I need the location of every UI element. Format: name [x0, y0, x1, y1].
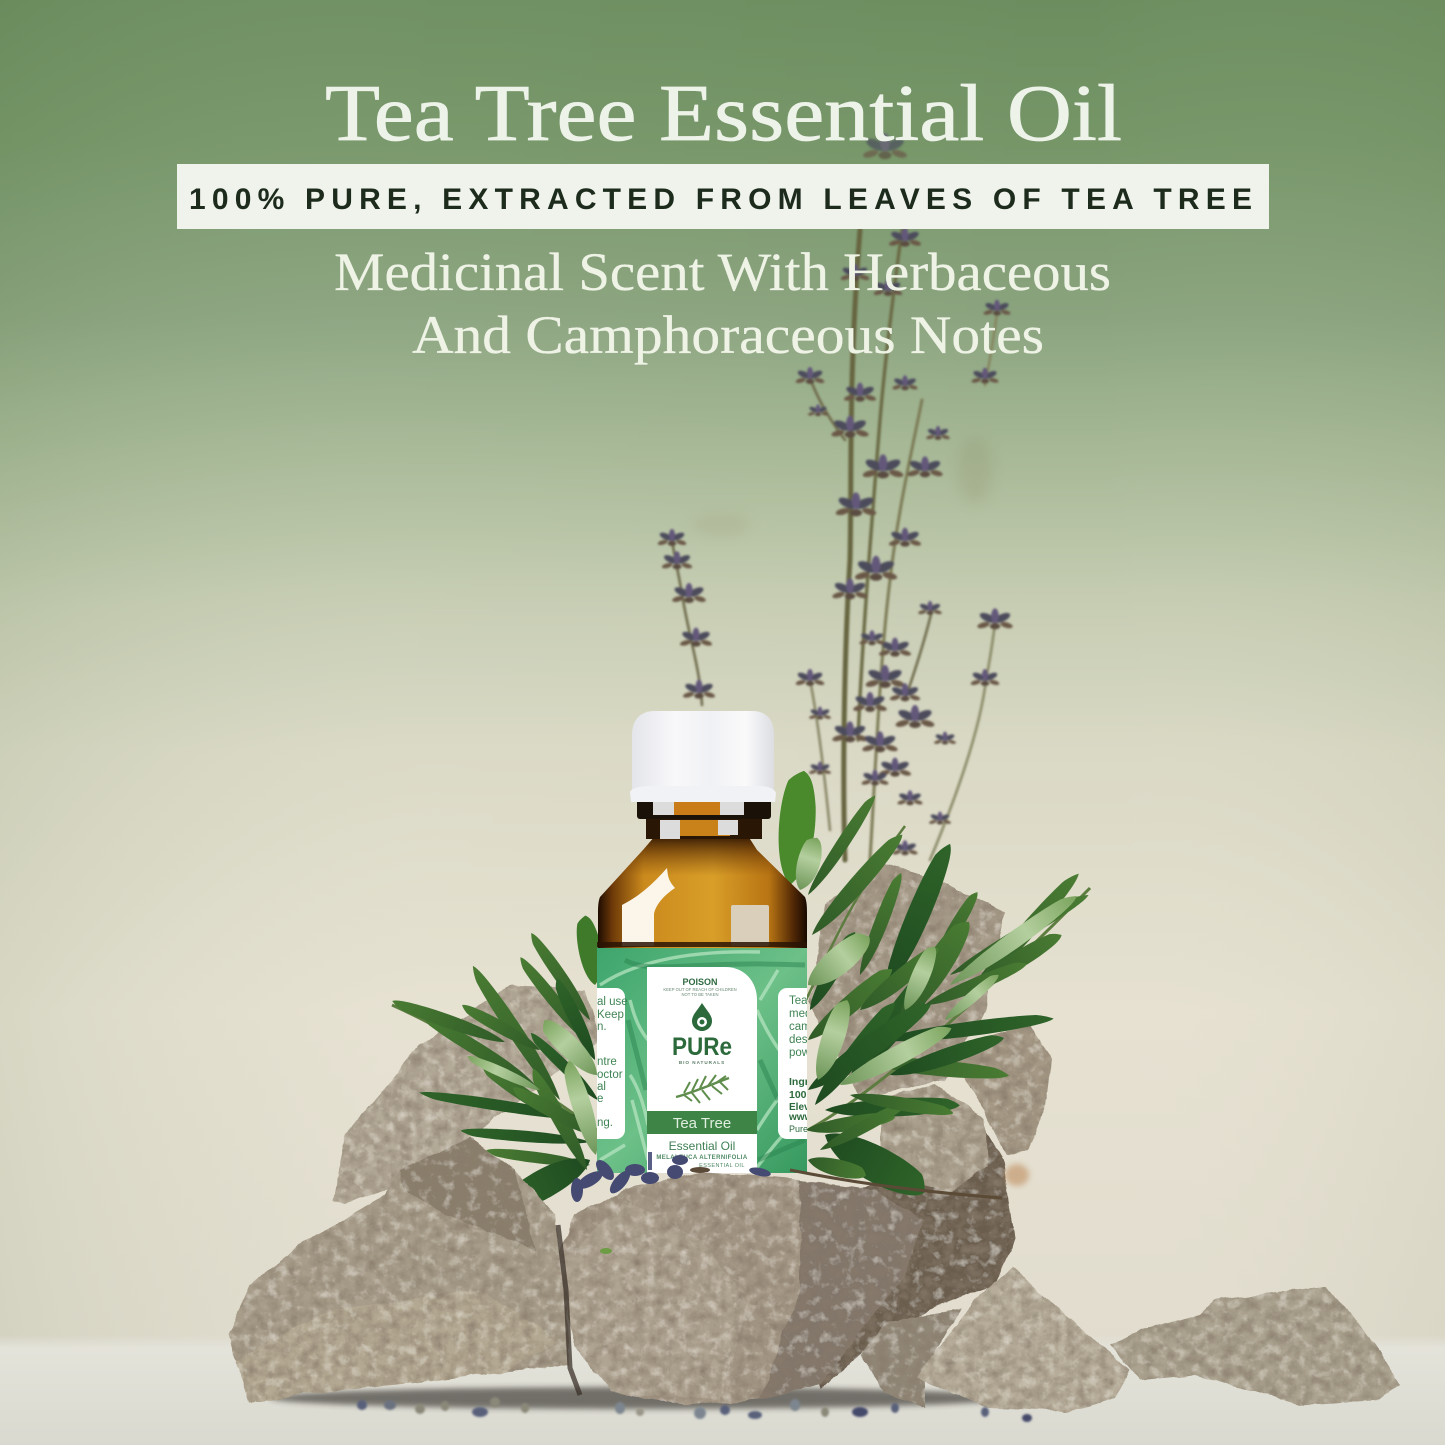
rock: upper right behind leaves — [810, 862, 1005, 1100]
label: 100 — [789, 1089, 807, 1101]
pure logo: PURe — [672, 1033, 732, 1061]
poison warning — [664, 978, 736, 996]
product bottle — [597, 711, 807, 1173]
essential oil text: Essential Oil — [669, 1139, 735, 1153]
rosemary sprig: right — [772, 769, 1092, 1208]
label: ESSENTIAL OIL — [699, 1163, 745, 1169]
label: pow — [789, 1047, 811, 1059]
crack between rocks — [558, 1225, 580, 1395]
rocks behind the sprigs — [333, 862, 1052, 1390]
label: Ingre — [789, 1076, 815, 1088]
rosemary sprig: left — [390, 914, 606, 1218]
rock: behind centre dark — [800, 1130, 1015, 1390]
poison warning: POISON — [682, 977, 718, 987]
pure logo: BIO NATURALS — [679, 1060, 725, 1065]
label: Tea — [789, 995, 808, 1007]
rock: triangular — [917, 1267, 1130, 1412]
subtitle: And Camphoraceous Notes — [412, 305, 1044, 365]
label: n. — [597, 1021, 607, 1033]
neck — [637, 797, 771, 819]
flower heads — [657, 133, 1013, 855]
title: Tea Tree Essential Oil — [325, 70, 1122, 158]
lavender crumbs on rock — [571, 1152, 772, 1202]
label sprig — [676, 1075, 729, 1103]
pure logo — [672, 1003, 732, 1065]
stems — [808, 888, 1090, 1130]
shoulder rim — [597, 942, 807, 947]
label: cam — [789, 1021, 811, 1033]
rock: large left — [228, 1138, 570, 1402]
label — [597, 948, 807, 1173]
twig across rock — [790, 1170, 1002, 1198]
left info panel — [597, 988, 625, 1139]
table surface — [0, 1335, 1445, 1445]
label: al — [597, 1081, 606, 1093]
white cap — [632, 711, 774, 792]
subtitle: Medicinal Scent With Herbaceous — [334, 242, 1111, 302]
small leaf fragment on rock — [600, 1248, 612, 1254]
poison warning: KEEP OUT OF REACH OF CHILDREN — [663, 987, 737, 992]
label: Tea Tree — [673, 1115, 731, 1132]
tagline band: 100% PURE, EXTRACTED FROM LEAVES OF TEA TREE — [189, 183, 1252, 216]
label: Pure — [789, 1124, 808, 1134]
label: Keep — [597, 1009, 624, 1021]
label: desc — [789, 1034, 814, 1046]
rock: small behind triangle — [860, 1310, 960, 1408]
rock: right mid — [880, 1085, 988, 1192]
stems — [672, 230, 998, 860]
subtitle — [334, 242, 1111, 365]
poison warning: NOT TO BE TAKEN — [681, 992, 719, 997]
stems — [392, 1005, 597, 1130]
soil shadow under rocks — [270, 1387, 1010, 1409]
label: MELALEUCA ALTERNIFOLIA — [656, 1155, 748, 1161]
label: ng. — [597, 1117, 613, 1129]
small blurred leaf fragment — [1005, 1164, 1029, 1186]
label: www — [788, 1112, 813, 1123]
rocks in front — [228, 1138, 1400, 1412]
centre white panel — [647, 967, 757, 1175]
label leaf pattern — [599, 950, 783, 1168]
label: med — [789, 1008, 811, 1020]
label: Elev — [789, 1102, 810, 1113]
label: al use — [597, 996, 628, 1008]
right info panel — [778, 988, 807, 1139]
label: e — [597, 1093, 603, 1105]
rock: far right slab — [1110, 1287, 1400, 1405]
glass highlights — [622, 868, 675, 946]
dried lavender stems — [657, 133, 1013, 860]
label: octor — [597, 1069, 623, 1081]
tea tree band — [647, 1111, 757, 1134]
tagline band — [177, 164, 1269, 229]
rock: upper left slab — [333, 985, 600, 1204]
label: ntre — [597, 1056, 617, 1068]
amber glass body — [598, 836, 807, 950]
rock: right upper — [945, 1025, 1052, 1155]
rock: large centre — [556, 1172, 922, 1405]
lavender crumbs on table — [357, 1397, 1032, 1422]
